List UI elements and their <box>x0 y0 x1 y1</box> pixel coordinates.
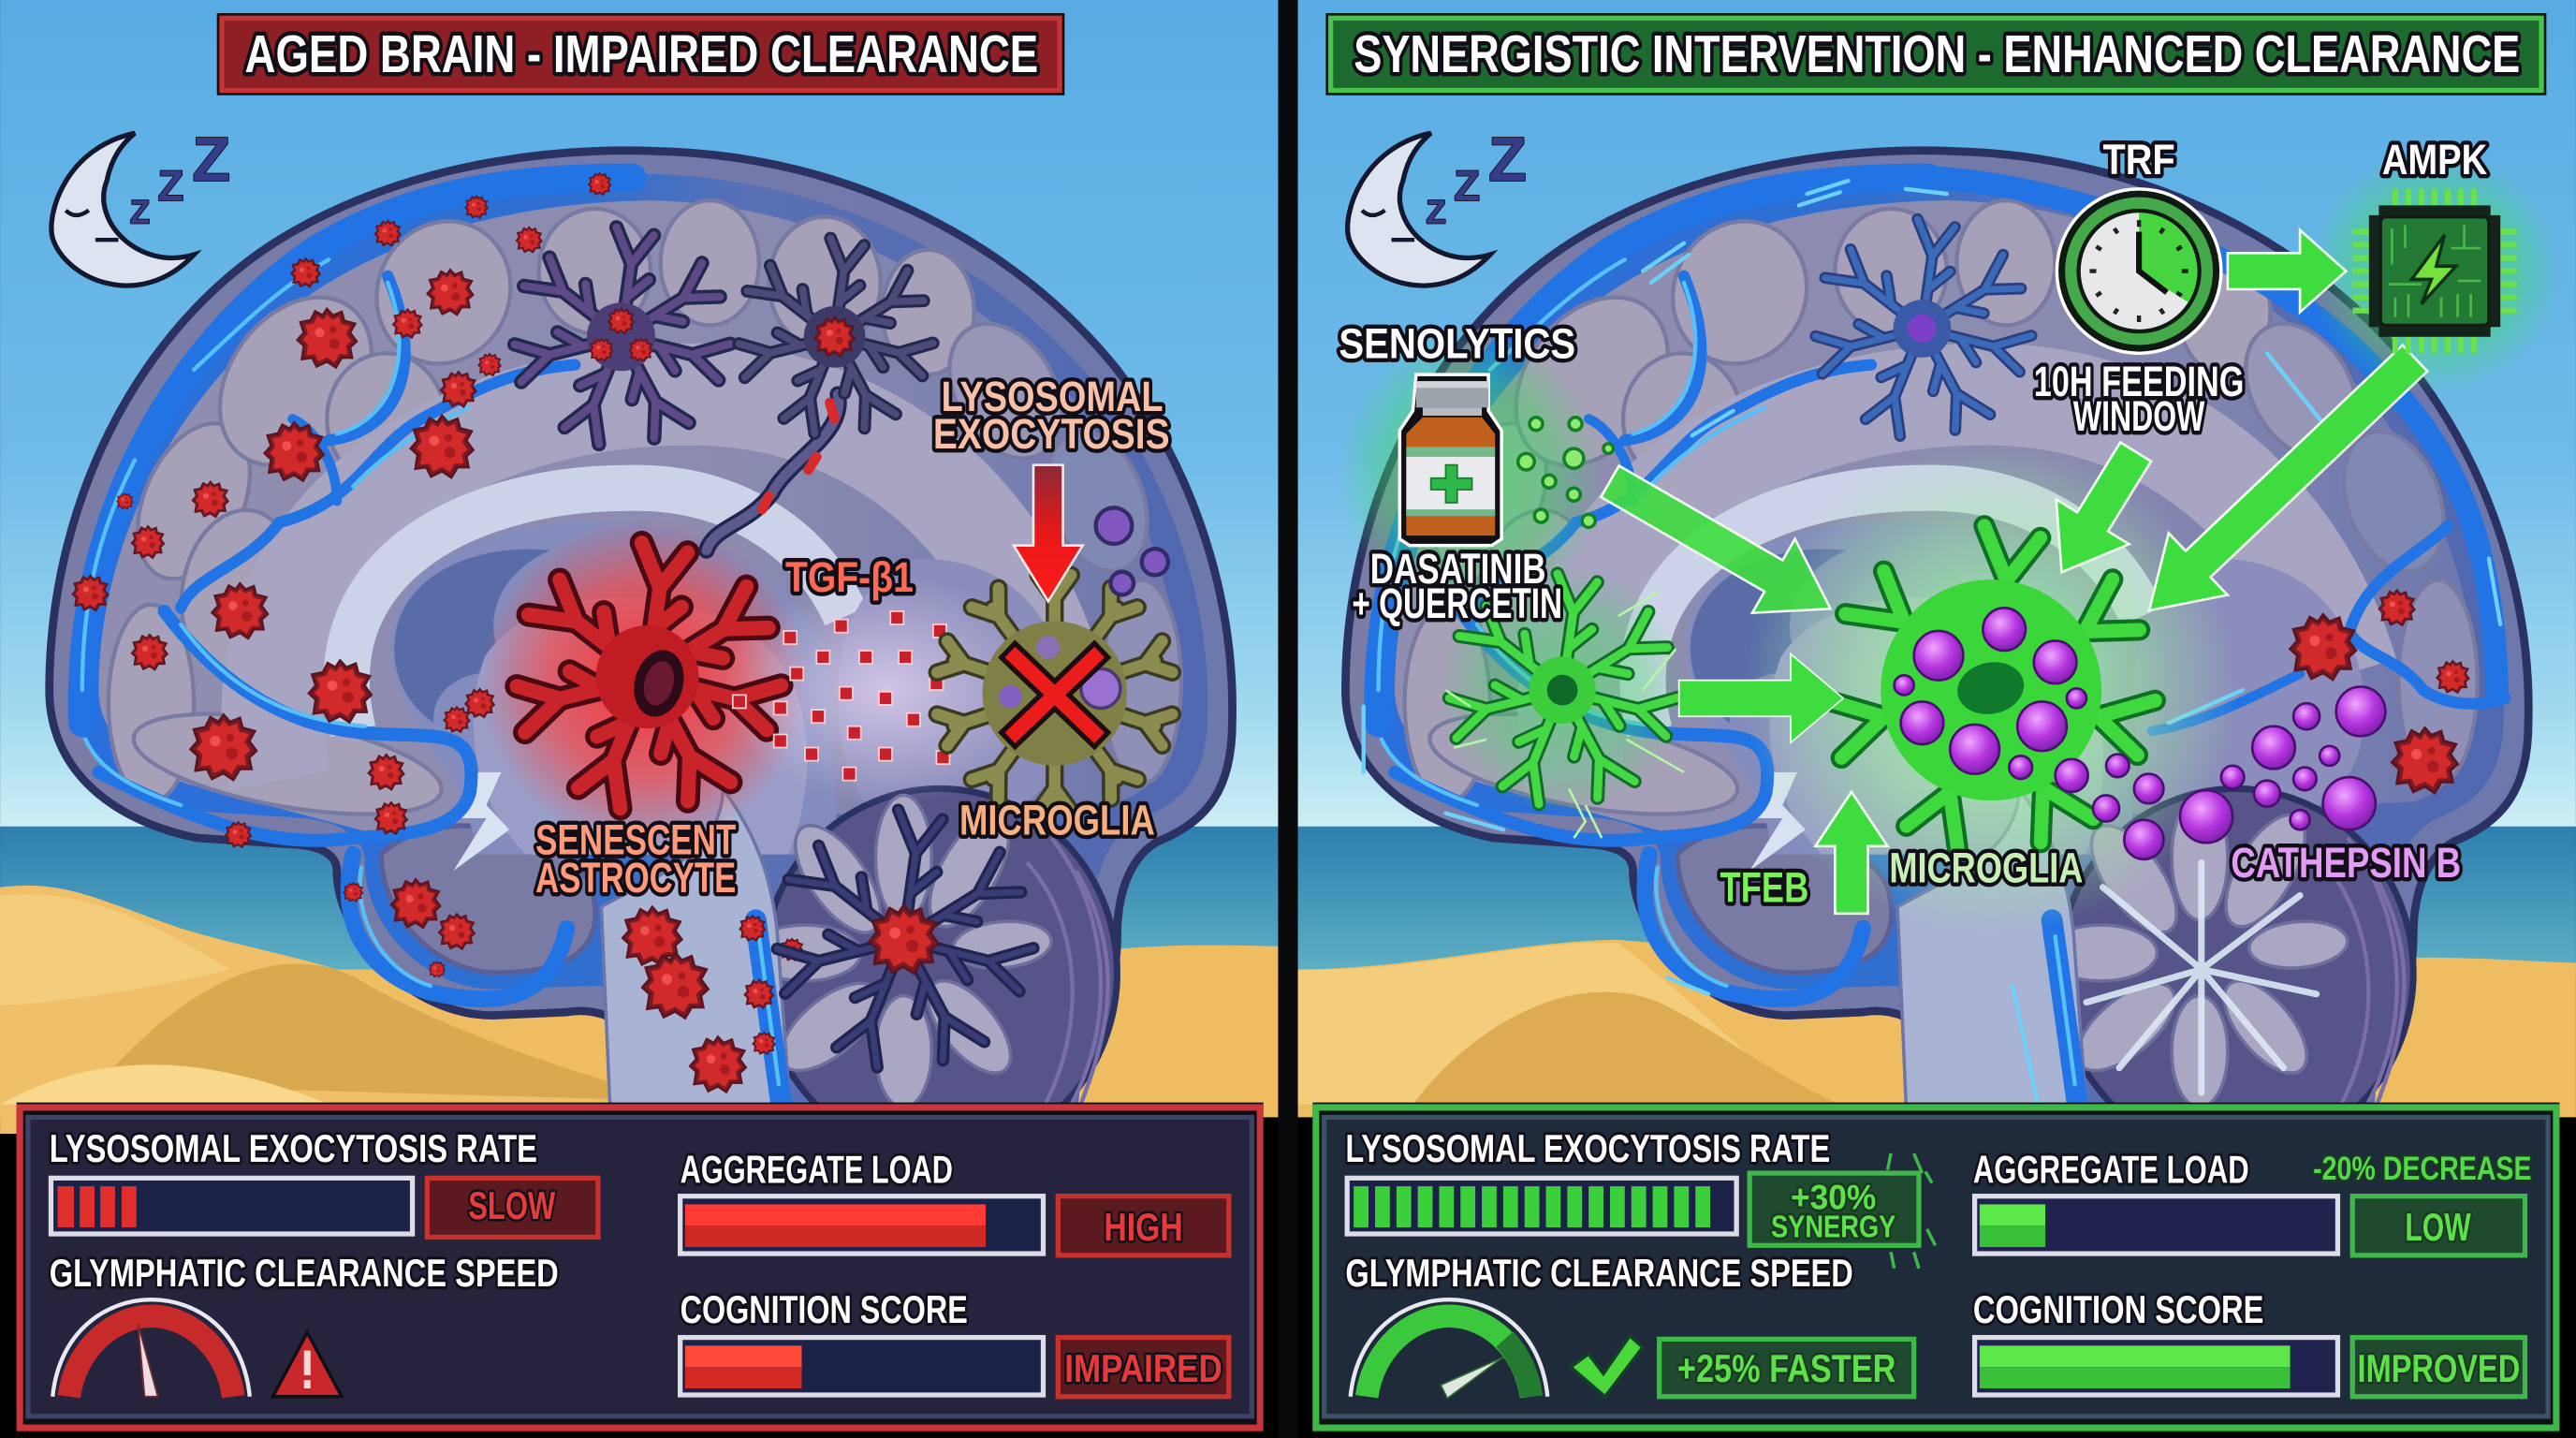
metric: aggregate load <box>1973 1148 2532 1255</box>
title: left <box>217 13 1064 95</box>
glow: chip <box>2308 148 2561 394</box>
glow: senescent astrocyte <box>480 518 809 846</box>
arrow: tfeb <box>1815 792 1888 914</box>
icon: moon left <box>51 125 230 286</box>
icon: moon right: Z <box>1426 195 1446 231</box>
senolytic particles <box>1518 418 1613 527</box>
arrow: trf to microglia <box>2026 430 2172 594</box>
vesicles: stuck <box>1096 507 1168 594</box>
icon: moon left: Z <box>192 125 230 195</box>
panel: right metrics <box>1312 1103 2559 1432</box>
panel: left scene background <box>0 0 1278 1134</box>
icon: moon left: Z <box>130 195 150 231</box>
label: microglia right: MICROGLIA <box>1889 844 2083 891</box>
vesicles: cathepsin b <box>1895 608 2385 859</box>
label: tfeb: TFEB <box>1720 864 1808 912</box>
label: 10h feeding window <box>2034 358 2244 440</box>
icon: moon right: Z <box>1454 162 1480 210</box>
astrocyte: rejuvenated <box>1446 574 1678 804</box>
label: lysosomal exocytosis <box>933 373 1170 458</box>
label: dasatinib + quercetin: DASATINIB <box>1370 545 1546 593</box>
microglia: activated <box>1827 526 2155 851</box>
aggregates: red plaques left <box>72 172 803 1092</box>
cerebellum arbor <box>2086 862 2317 1093</box>
label: tgf-b1: TGF-β1 <box>785 553 914 601</box>
glow: microglia <box>1745 444 2237 936</box>
panel: left metrics <box>17 1103 1264 1432</box>
astrocyte: senescent <box>513 543 782 809</box>
icon: ampk chip <box>2352 189 2517 353</box>
metric: cognition score: COGNITION SCORE <box>681 1287 968 1331</box>
metric: glymphatic speed <box>50 1251 559 1397</box>
axon <box>707 394 839 550</box>
tgf-b1 particles <box>733 611 949 781</box>
microglia: impaired <box>937 575 1172 812</box>
metric: aggregate load: AGGREGATE LOAD <box>681 1148 953 1192</box>
badge: +30% synergy <box>1749 1153 1935 1269</box>
arrow: ampk to microglia <box>2120 327 2444 641</box>
metric: lysosomal rate: SLOW <box>468 1183 555 1227</box>
label: dasatinib + quercetin: + QUERCETIN <box>1352 580 1562 627</box>
arrow: senolytics to microglia <box>1588 445 1852 646</box>
label: 10h feeding window: WINDOW <box>2073 392 2205 440</box>
icon: moon right <box>1348 125 1527 286</box>
metric: cognition score: IMPAIRED <box>1064 1346 1222 1390</box>
arrow: exocytosis blocked <box>1014 465 1083 601</box>
neuron: healthy <box>1813 219 2031 436</box>
divider <box>1278 0 1298 1438</box>
label: lysosomal exocytosis: LYSOSOMAL <box>942 373 1164 420</box>
metric: cognition score: IMPROVED <box>2358 1346 2520 1390</box>
icon: clock <box>2056 187 2223 355</box>
metric: aggregate load: AGGREGATE LOAD <box>1973 1148 2249 1192</box>
label: 10h feeding window: 10H FEEDING <box>2034 358 2244 405</box>
arrow: trf to ampk <box>2228 230 2346 312</box>
icon: warning <box>272 1332 342 1397</box>
title: right <box>1325 13 2546 95</box>
metric: lysosomal rate: LYSOSOMAL EXOCYTOSIS RATE <box>50 1126 537 1170</box>
badge: +30% synergy: SYNERGY <box>1771 1211 1895 1245</box>
icon: moon left: Z <box>158 162 183 210</box>
metric: glymphatic speed: GLYMPHATIC CLEARANCE SPEED <box>1345 1251 1853 1295</box>
badge: +30% synergy: +30% <box>1791 1179 1876 1217</box>
title: left: AGED BRAIN - IMPAIRED CLEARANCE <box>245 24 1038 83</box>
neuron: dark 2 <box>736 239 933 433</box>
label: cathepsin b: CATHEPSIN B <box>2231 839 2461 887</box>
metric: cognition score <box>681 1287 1229 1397</box>
label: dasatinib + quercetin <box>1352 545 1562 627</box>
metric: cognition score <box>1973 1287 2525 1397</box>
brain: intervention <box>1345 151 2528 1157</box>
neuron: dark 1 <box>512 227 730 444</box>
icon: moon right: Z <box>1488 125 1527 195</box>
metric: glymphatic speed <box>1345 1251 1914 1399</box>
sparks: astrocyte <box>1445 592 1684 838</box>
icon: checkmark <box>1571 1336 1643 1397</box>
metric: aggregate load <box>681 1148 1229 1255</box>
haze: tgf cloud <box>723 575 1051 805</box>
label: lysosomal exocytosis: EXOCYTOSIS <box>933 410 1170 458</box>
metric: glymphatic speed: GLYMPHATIC CLEARANCE SPEED <box>50 1251 559 1295</box>
metric: lysosomal rate <box>50 1126 598 1238</box>
metric: cognition score: COGNITION SCORE <box>1973 1287 2263 1331</box>
red x <box>1016 657 1094 733</box>
metric: aggregate load: -20% DECREASE <box>2313 1151 2532 1187</box>
label: senescent astrocyte: SENESCENT <box>535 816 736 864</box>
icon: pill bottle <box>1399 374 1501 546</box>
metric: lysosomal rate <box>1345 1126 1935 1269</box>
label: senescent astrocyte: ASTROCYTE <box>535 854 736 902</box>
brain: aged <box>50 151 1233 1157</box>
label: senolytics: SENOLYTICS <box>1339 320 1575 368</box>
panel: right scene background <box>1298 0 2576 1117</box>
neuron: cerebellar <box>774 810 1033 1067</box>
arrow: astrocyte to microglia <box>1679 654 1843 742</box>
badge: +25% faster: +25% FASTER <box>1677 1346 1895 1390</box>
label: trf: TRF <box>2102 136 2175 183</box>
metric: aggregate load: LOW <box>2405 1205 2471 1249</box>
aggregates: remaining <box>2291 590 2469 793</box>
badge: +25% faster <box>1660 1339 1914 1397</box>
metric: lysosomal rate: LYSOSOMAL EXOCYTOSIS RATE <box>1345 1126 1830 1170</box>
label: microglia: MICROGLIA <box>959 797 1155 844</box>
glow: bottle <box>1339 329 1602 624</box>
glow: astrocyte <box>1439 566 1686 814</box>
label: ampk: AMPK <box>2382 136 2487 183</box>
metric: aggregate load: HIGH <box>1104 1205 1183 1249</box>
label: senescent astrocyte <box>535 816 736 902</box>
